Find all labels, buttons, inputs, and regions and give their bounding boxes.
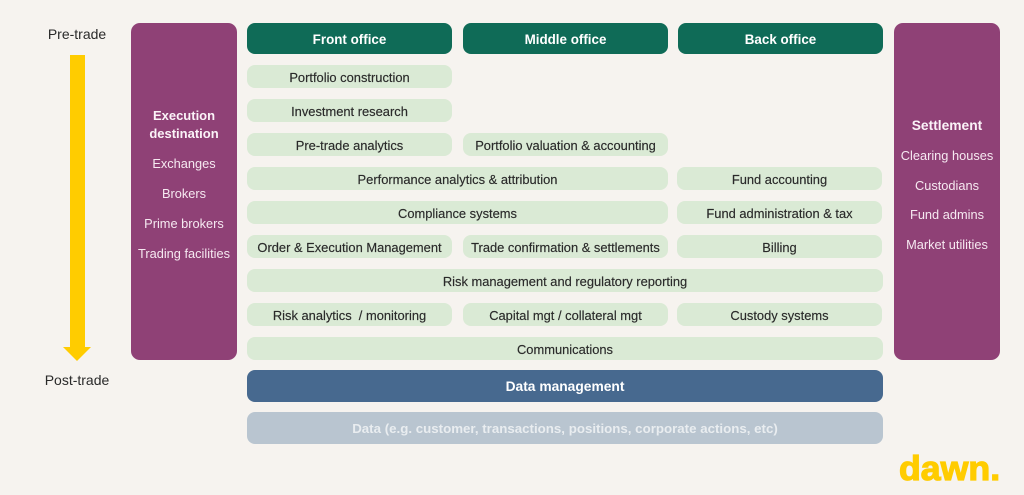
row: risk management and regulatory reporting: Risk management and regulatory reporting: [443, 274, 687, 288]
label: post-trade: Post-trade: [45, 372, 109, 388]
row: billing: Billing: [762, 240, 797, 254]
label: pre-trade: Pre-trade: [48, 26, 106, 42]
heading: settlement: Settlement: [912, 118, 982, 133]
row: billing: [677, 235, 882, 258]
row: custody systems: Custody systems: [730, 308, 829, 322]
row: portfolio construction: [247, 65, 452, 88]
row: custody systems: [677, 303, 882, 326]
arrow: pre-trade to post-trade: [63, 55, 91, 361]
row: fund administration and tax: [677, 201, 882, 224]
heading: execution destination: Execution destination: [149, 108, 219, 141]
row: risk management and regulatory reporting: [247, 269, 883, 292]
item: brokers: Brokers: [162, 186, 206, 201]
row: investment research: Investment research: [291, 104, 408, 118]
row: trade confirmation and settlements: Trade confirmation & settlements: [471, 240, 660, 254]
row: capital and collateral management: [463, 303, 668, 326]
item: clearing houses: Clearing houses: [901, 148, 993, 163]
row: portfolio valuation and accounting: Portfolio valuation & accounting: [475, 138, 656, 152]
row: order and execution management: [247, 235, 452, 258]
row: performance analytics and attribution: Performance analytics & attribution: [358, 172, 557, 186]
row: fund administration and tax: Fund administration & tax: [706, 206, 853, 220]
row: portfolio construction: Portfolio construction: [289, 70, 410, 84]
row: risk analytics and monitoring: [247, 303, 452, 326]
row: fund accounting: Fund accounting: [732, 172, 827, 186]
row: pre-trade analytics: Pre-trade analytics: [296, 138, 403, 152]
row: performance analytics and attribution: [247, 167, 668, 190]
row: communications: [247, 337, 883, 360]
row: fund accounting: [677, 167, 882, 190]
item: market utilities: Market utilities: [906, 237, 988, 252]
heading: middle office: [463, 23, 668, 54]
row: communications: Communications: [517, 342, 613, 356]
item: trading facilities: Trading facilities: [138, 246, 230, 261]
panel: execution destination: [131, 23, 237, 360]
heading: back office: [678, 23, 883, 54]
item: fund admins: Fund admins: [910, 207, 984, 222]
bar: data: Data (e.g. customer, transactions, positions, corporate actions, etc): [352, 421, 778, 436]
item: custodians: Custodians: [915, 178, 979, 193]
bar: data management: Data management: [506, 379, 624, 394]
heading: front office: [247, 23, 452, 54]
row: investment research: [247, 99, 452, 122]
row: compliance systems: Compliance systems: [398, 206, 517, 220]
row: risk analytics and monitoring: Risk analytics / monitoring: [273, 308, 426, 322]
row: order and execution management: Order & Execution Management: [257, 240, 442, 254]
bar: data management: [247, 370, 883, 402]
heading: middle office: Middle office: [525, 32, 606, 46]
row: compliance systems: [247, 201, 668, 224]
item: prime brokers: Prime brokers: [144, 216, 224, 231]
row: capital and collateral management: Capital mgt / collateral mgt: [489, 308, 642, 322]
row: pre-trade analytics: [247, 133, 452, 156]
row: trade confirmation and settlements: [463, 235, 668, 258]
item: exchanges: Exchanges: [152, 156, 216, 171]
heading: back office: Back office: [745, 32, 816, 46]
heading: front office: Front office: [313, 32, 386, 46]
panel: settlement: [894, 23, 1000, 360]
bar: data: [247, 412, 883, 444]
row: portfolio valuation and accounting: [463, 133, 668, 156]
logo: dawn: dawn.: [899, 450, 1000, 488]
